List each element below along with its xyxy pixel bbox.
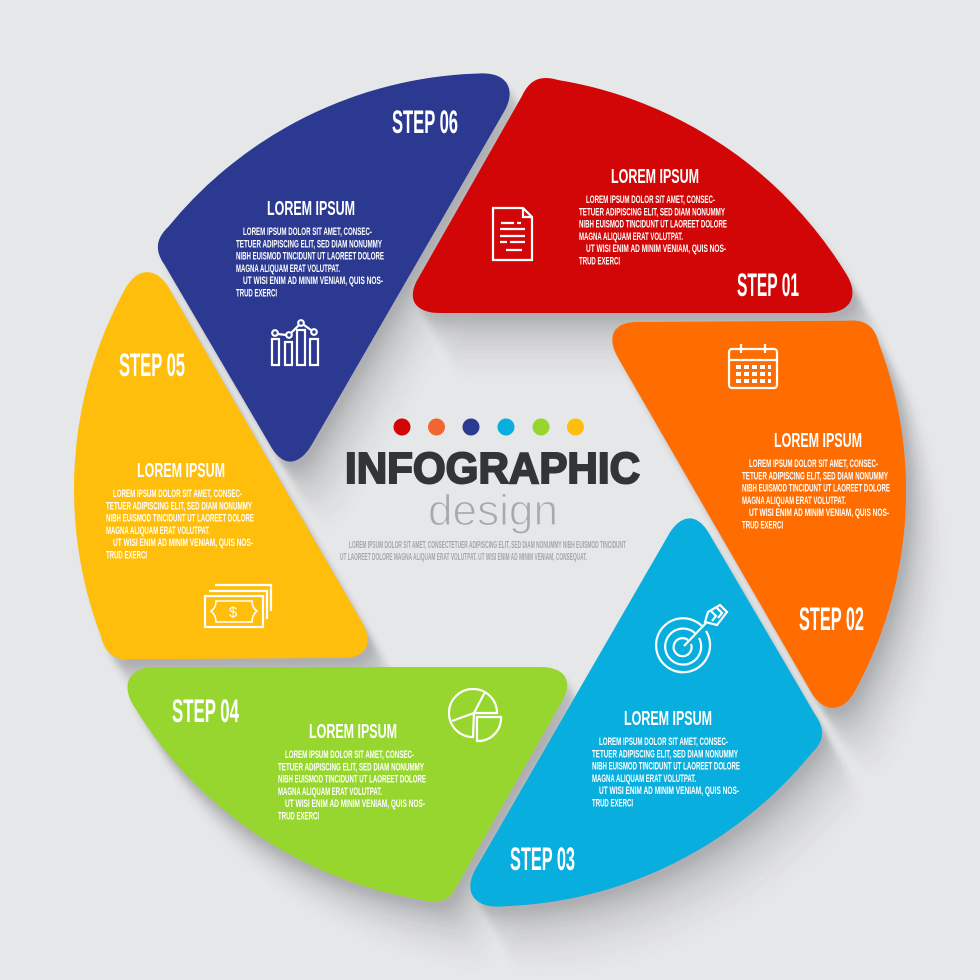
panel: step 06: LOREM IPSUM	[267, 198, 355, 220]
panel: step 02	[605, 217, 980, 715]
icon: banknotes: $	[229, 604, 238, 621]
panel: step 03: LOREM IPSUM	[624, 708, 712, 730]
panel: step 02: LOREM IPSUM	[774, 430, 862, 452]
panel: step 01: STEP 01	[737, 267, 799, 303]
panel: step 03: UT WISI ENIM AD MINIM VENIAM, QUIS NOS-	[599, 785, 739, 797]
panel: step 01	[413, 78, 852, 313]
panel: step 01: LOREM IPSUM DOLOR SIT AMET, CONSEC-	[586, 194, 715, 206]
icon: target with arrow	[656, 605, 727, 672]
panel: step 06: STEP 06	[392, 104, 458, 140]
icon: document	[493, 208, 532, 260]
panel: step 05: UT WISI ENIM AD MINIM VENIAM, QUIS NOS-	[113, 537, 253, 549]
panel: step 01: LOREM IPSUM	[611, 166, 699, 188]
center title block: LOREM IPSUM DOLOR SIT AMET, CONSECTETUER ADIPISCING ELIT, SED DIAM NONUMMY NIBH EUISMOD TINCIDUNT	[349, 540, 626, 551]
panel: step 05: LOREM IPSUM DOLOR SIT AMET, CONSEC-	[113, 488, 242, 500]
panel: step 01: NIBH EUISMOD TINCIDUNT UT LAOREET DOLORE	[579, 219, 727, 231]
panel: step 04: UT WISI ENIM AD MINIM VENIAM, QUIS NOS-	[285, 798, 425, 810]
panel: step 02: MAGNA ALIQUAM ERAT VOLUTPAT.	[742, 495, 846, 507]
panel: step 04: LOREM IPSUM	[309, 721, 397, 743]
panel: step 02: UT WISI ENIM AD MINIM VENIAM, QUIS NOS-	[749, 507, 889, 519]
panel: step 03: NIBH EUISMOD TINCIDUNT UT LAOREET DOLORE	[592, 761, 740, 773]
panel: step 01: UT WISI ENIM AD MINIM VENIAM, QUIS NOS-	[586, 243, 726, 255]
panel: step 04: TRUD EXERCI	[278, 810, 319, 822]
panel: step 05: NIBH EUISMOD TINCIDUNT UT LAOREET DOLORE	[106, 513, 254, 525]
panel: step 04: LOREM IPSUM DOLOR SIT AMET, CONSEC-	[285, 749, 414, 761]
panel: step 04	[128, 667, 567, 902]
panel: step 03	[462, 512, 885, 980]
center paragraph	[340, 540, 626, 563]
panel: step 06: TETUER ADIPISCING ELIT, SED DIAM NONUMMY	[236, 238, 382, 250]
panel: step 06: NIBH EUISMOD TINCIDUNT UT LAOREET DOLORE	[236, 251, 384, 263]
panel: step 01: TRUD EXERCI	[579, 256, 620, 268]
panel: step 01: TETUER ADIPISCING ELIT, SED DIAM NONUMMY	[579, 206, 725, 218]
panel: step 02: STEP 02	[799, 601, 864, 637]
panel: step 04: TETUER ADIPISCING ELIT, SED DIAM NONUMMY	[278, 761, 424, 773]
panel: step 01: MAGNA ALIQUAM ERAT VOLUTPAT.	[579, 231, 683, 243]
panel: step 05: TRUD EXERCI	[106, 550, 147, 562]
panel: step 06: LOREM IPSUM DOLOR SIT AMET, CONSEC-	[243, 226, 372, 238]
subheading: design	[428, 486, 558, 535]
colour dots	[394, 418, 584, 436]
panel: step 05: LOREM IPSUM	[137, 460, 225, 482]
panel: step 04: MAGNA ALIQUAM ERAT VOLUTPAT.	[278, 786, 382, 798]
panel: step 06	[95, 0, 518, 468]
panel: step 02: TRUD EXERCI	[742, 520, 783, 532]
center paragraph: UT LAOREET DOLORE MAGNA ALIQUAM ERAT VOLUTPAT. UT WISI ENIM AD MINIM VENIAM, CONSEQUAT.	[340, 552, 587, 563]
panel: step 06: UT WISI ENIM AD MINIM VENIAM, QUIS NOS-	[243, 275, 383, 287]
panel: step 02: LOREM IPSUM DOLOR SIT AMET, CONSEC-	[749, 458, 878, 470]
panel: step 04: NIBH EUISMOD TINCIDUNT UT LAOREET DOLORE	[278, 774, 426, 786]
panel: step 05: STEP 05	[119, 347, 185, 383]
panel: step 05: TETUER ADIPISCING ELIT, SED DIAM NONUMMY	[106, 500, 252, 512]
icon: pie chart	[449, 689, 501, 741]
panel: step 06: TRUD EXERCI	[236, 288, 277, 300]
panel: step 05: MAGNA ALIQUAM ERAT VOLUTPAT.	[106, 525, 210, 537]
icon: banknotes	[205, 585, 271, 627]
panel: step 03: MAGNA ALIQUAM ERAT VOLUTPAT.	[592, 773, 696, 785]
panel: step 05	[0, 265, 375, 763]
icon: calendar	[729, 344, 777, 388]
panel: step 03: TRUD EXERCI	[592, 798, 633, 810]
panel: step 03: STEP 03	[510, 841, 575, 877]
panel: step 03: TETUER ADIPISCING ELIT, SED DIAM NONUMMY	[592, 748, 738, 760]
icon: bar chart	[272, 320, 318, 365]
panel: step 03: LOREM IPSUM DOLOR SIT AMET, CONSEC-	[599, 736, 728, 748]
center title block	[340, 418, 640, 563]
heading: INFOGRAPHIC	[345, 444, 640, 493]
panel: step 04: STEP 04	[172, 693, 239, 729]
panel: step 06: MAGNA ALIQUAM ERAT VOLUTPAT.	[236, 263, 340, 275]
